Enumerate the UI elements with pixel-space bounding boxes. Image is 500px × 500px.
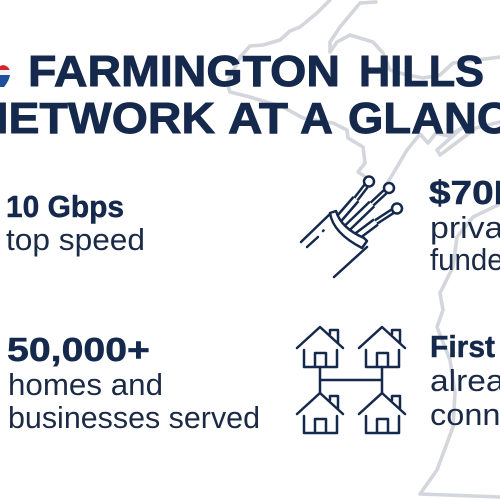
title: HILLS <box>359 48 484 96</box>
title: AT <box>228 95 288 143</box>
stat: homes and businesses served <box>7 331 260 435</box>
stat: first connections <box>430 329 500 432</box>
title: FARMINGTON <box>28 48 340 96</box>
background map of Michigan <box>227 0 500 497</box>
stat: homes and businesses served: homes and <box>8 367 163 402</box>
title: A <box>300 95 333 143</box>
icon: connected houses <box>297 327 405 433</box>
icon: fiber optic cable <box>301 176 402 277</box>
house top right <box>359 327 405 367</box>
stat: homes and businesses served: businesses served <box>8 400 260 435</box>
stat: top speed: top speed <box>6 222 145 257</box>
stat: homes and businesses served: 50,000+ <box>7 331 150 368</box>
house bottom right <box>359 393 405 433</box>
house top left <box>297 327 343 367</box>
house bottom left <box>297 393 343 433</box>
title <box>0 48 500 143</box>
stat: top speed: 10 Gbps <box>6 189 124 224</box>
stat: top speed <box>6 189 145 257</box>
logo: balloon <box>0 65 10 87</box>
network connector <box>320 367 382 393</box>
stat: first connections: First <box>430 329 495 364</box>
stat: private funding <box>429 174 500 277</box>
